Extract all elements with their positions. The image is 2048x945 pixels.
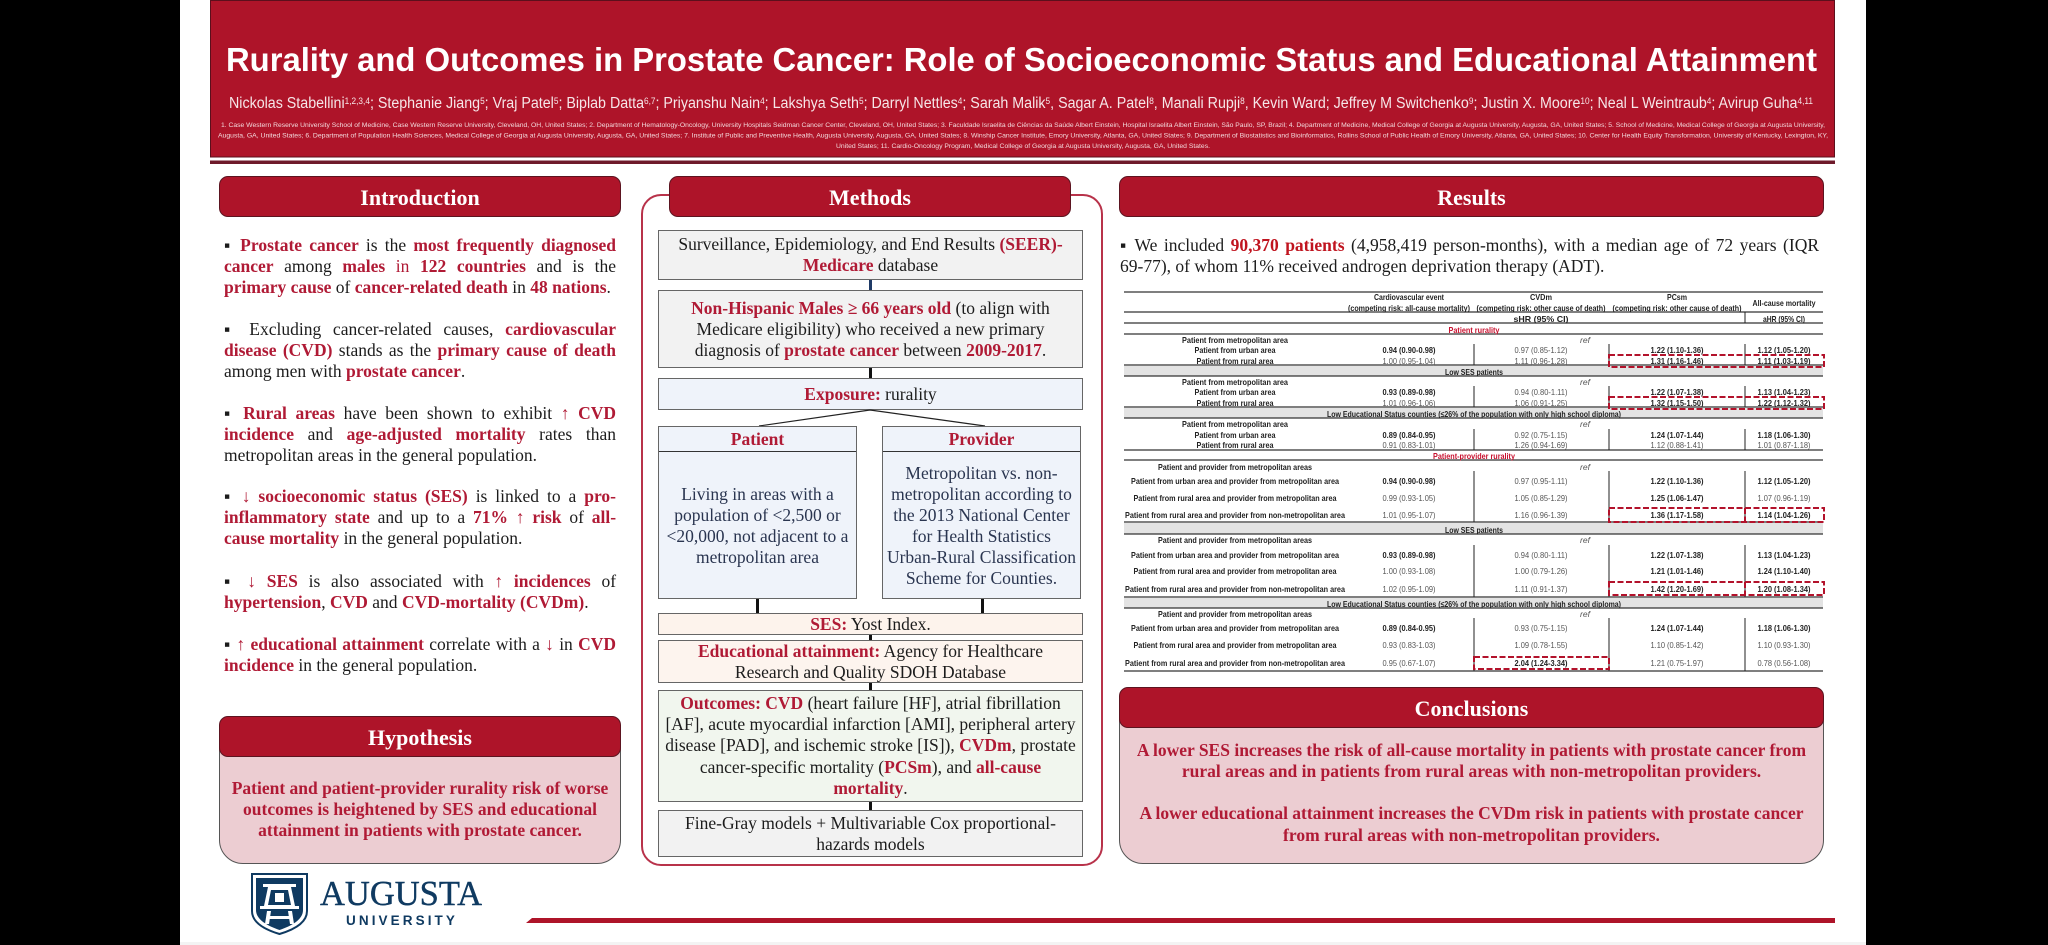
provider definition: Metropolitan vs. non- <box>905 463 1058 483</box>
rows: provider low SES: 1.20 (1.08-1.34) <box>1758 584 1811 594</box>
authors: 4 <box>1707 96 1711 106</box>
footer rule <box>526 918 1835 923</box>
rows: patient-provider rurality: Patient from urban area and provider from metropolitan area <box>1131 476 1339 486</box>
rows: low educational status: 0.92 (0.75-1.15) <box>1514 430 1568 440</box>
rows: patient rurality: 1.31 (1.16-1.46) <box>1650 356 1704 366</box>
table column headers: PCsm <box>1667 292 1687 302</box>
provider definition <box>887 463 1076 588</box>
box: models: hazards models <box>816 834 925 854</box>
authors: ; Priyanshu Nain <box>656 95 760 112</box>
provider definition: Urban-Rural Classification <box>887 547 1076 567</box>
box: provider <box>882 426 1081 599</box>
rows: provider low educational status: 1.18 (1.06-1.30) <box>1758 623 1811 633</box>
rows: patient rurality: 1.11 (1.03-1.19) <box>1758 356 1811 366</box>
box: population <box>658 290 1083 368</box>
authors: Nickolas Stabellini <box>229 95 355 112</box>
box: educational attainment <box>658 640 1083 683</box>
authors: 5 <box>554 96 558 106</box>
authors: ; Lakshya Seth <box>765 95 859 112</box>
rows: low educational status: 1.12 (0.88-1.41) <box>1650 440 1704 450</box>
authors: 4,11 <box>1798 96 1813 106</box>
rows: patient-provider rurality: 1.22 (1.10-1.36) <box>1650 476 1704 486</box>
rows: low educational status: 1.01 (0.87-1.18) <box>1758 440 1811 450</box>
rows: low educational status: 1.24 (1.07-1.44) <box>1650 430 1704 440</box>
box: outcomes: Outcomes: CVD (heart failure [HF], atrial fibrillation <box>680 693 1061 713</box>
text: SES and hypertension: hypertension, CVD and CVD-mortality (CVDm). <box>224 592 589 612</box>
rows: low educational status: 1.18 (1.06-1.30) <box>1758 430 1811 440</box>
rows: provider low educational status: 0.93 (0.75-1.15) <box>1514 623 1568 633</box>
rows: provider low SES: 1.22 (1.07-1.38) <box>1650 550 1704 560</box>
authors: ; Sarah Malik <box>962 95 1046 112</box>
rows: patient-provider rurality: Patient and provider from metropolitan areas <box>1158 462 1312 472</box>
text: rural areas <box>224 403 616 465</box>
authors: 9 <box>1469 96 1473 106</box>
rows: low SES patients: 1.32 (1.15-1.50) <box>1650 398 1704 408</box>
panel: conclusions <box>1119 687 1824 864</box>
text: educational attainment: ▪ ↑ educational attainment correlate with a ↓ in CVD <box>224 634 616 654</box>
rows: provider low SES: 1.02 (0.95-1.09) <box>1382 584 1436 594</box>
rows: provider low educational status: 2.04 (1.24-3.34) <box>1514 658 1568 668</box>
rows: patient-provider rurality: 0.99 (0.93-1.05) <box>1382 493 1436 503</box>
rows: patient-provider rurality: 1.16 (0.96-1.39) <box>1514 510 1568 520</box>
rows: provider low SES: 1.13 (1.04-1.23) <box>1758 550 1811 560</box>
rows: provider low SES: 0.94 (0.80-1.11) <box>1514 550 1568 560</box>
hypothesis text <box>232 778 608 840</box>
rows: provider low educational status: 1.10 (0.85-1.42) <box>1650 640 1704 650</box>
authors: 5 <box>480 96 485 106</box>
authors: 6,7 <box>644 96 656 106</box>
provider definition: metropolitan according to <box>891 484 1072 504</box>
authors: 5 <box>1046 96 1050 106</box>
box: exposure <box>658 378 1083 410</box>
text: SES and hypertension: ▪ ↓ SES is also associated with ↑ incidences of <box>224 571 616 591</box>
rows: patient-provider rurality: 1.01 (0.95-1.07) <box>1382 510 1436 520</box>
box: models: Fine-Gray models + Multivariable Cox proportional- <box>685 812 1056 832</box>
rows: patient rurality: 1.22 (1.10-1.36) <box>1650 345 1704 355</box>
authors: 8 <box>1240 96 1245 106</box>
table column headers: (competing risk: other cause of death) <box>1476 303 1606 313</box>
rows: provider low educational status: 0.89 (0.84-0.95) <box>1382 623 1436 633</box>
authors: 4 <box>958 96 962 106</box>
rows: patient-provider rurality: 0.94 (0.90-0.98) <box>1382 476 1436 486</box>
text: rural areas: incidence and age-adjusted mortality rates than <box>224 424 616 444</box>
box: outcomes: disease [PAD], and ischemic stroke [IS]), CVDm, prostate <box>665 735 1076 755</box>
rows: patient rurality: Patient from metropolitan area <box>1182 335 1288 345</box>
table column headers: All-cause mortality <box>1752 298 1816 308</box>
rows: provider low educational status: Patient from rural area and provider from metropolitan area <box>1134 640 1337 650</box>
rows: provider low educational status: Patient from urban area and provider from metropolitan area <box>1131 623 1339 633</box>
box: patient <box>658 426 857 599</box>
rows: provider low educational status: Patient from rural area and provider from non-metropolitan area <box>1125 658 1345 668</box>
panel: introduction <box>219 176 621 675</box>
heading: results <box>1119 176 1824 217</box>
rows: low educational status: ref <box>1580 419 1592 429</box>
rows: low SES patients: Patient from metropolitan area <box>1182 377 1288 387</box>
rows: patient-provider rurality: Patient from rural area and provider from non-metropolitan area <box>1125 510 1345 520</box>
authors: ; Biplab Datta <box>558 95 644 112</box>
rows: low educational status: 0.89 (0.84-0.95) <box>1382 430 1436 440</box>
authors: ; Darryl Nettles <box>864 95 958 112</box>
rows: low educational status: Patient from urban area <box>1194 430 1276 440</box>
logo wordmark: AUGUSTA <box>320 875 482 913</box>
affiliations: 1. Case Western Reserve University School of Medicine, Case Western Reserve University, Cleveland, OH, United States; 2. Department of Hematology-Oncology, University Hospitals Seidman Cancer Center, Cleveland, OH, United States; 3. Faculdade Israelita de Ciências da Saúde Albert Einstein, Hospital Israelita Albert Einstein, São Paulo, SP, Brazil; 4. Department of Medicine, Medical College of Georgia at Augusta University, Augusta, GA, United States; 5. School of Medicine, Medical College of Georgia at Augusta University, <box>221 122 1825 129</box>
heading: hypothesis <box>219 716 621 757</box>
title: Rurality and Outcomes in Prostate Cancer: Role of Socioeconomic Status and Educational Attainment <box>226 41 1817 78</box>
arrow: patient to SES <box>756 599 759 613</box>
rows: provider low educational status <box>1125 599 1811 668</box>
authors: 1,2,3,4 <box>345 96 370 106</box>
rows: low SES patients: 1.22 (1.12-1.32) <box>1758 398 1811 408</box>
text: cohort summary: ▪ We included 90,370 patients (4,958,419 person-months), with a median age of 72 years (IQR <box>1120 235 1819 255</box>
affiliations <box>218 122 1828 150</box>
panel: hypothesis <box>219 716 621 864</box>
table column headers: aHR (95% CI) <box>1763 314 1805 324</box>
box: population: Non-Hispanic Males ≥ 66 years old (to align with <box>691 298 1050 318</box>
table: hazard ratios <box>1124 291 1825 672</box>
header banner <box>210 0 1835 164</box>
table column headers: sHR (95% CI) <box>1514 314 1569 324</box>
box: educational attainment: Research and Quality SDOH Database <box>735 662 1006 682</box>
rows: provider low educational status: Patient and provider from metropolitan areas <box>1158 609 1312 619</box>
heading: hypothesis: Hypothesis <box>368 725 472 750</box>
rows: low educational status: Patient from metropolitan area <box>1182 419 1288 429</box>
conclusion: education <box>1140 803 1804 845</box>
authors: ; Justin X. Moore <box>1473 95 1580 112</box>
table column headers: (competing risk: all-cause mortality) <box>1348 303 1470 313</box>
rows: provider low educational status: 0.78 (0.56-1.08) <box>1758 658 1811 668</box>
rows: provider low educational status: Low Educational Status counties (≤26% of the population with only high school diploma) <box>1327 599 1621 609</box>
provider label: Provider <box>949 429 1014 449</box>
rows: provider low educational status: 0.93 (0.83-1.03) <box>1382 640 1436 650</box>
box: data source <box>658 230 1083 280</box>
box: educational attainment: Educational attainment: Agency for Healthcare <box>698 640 1043 660</box>
section bands and rules <box>1124 292 1823 671</box>
rows: patient rurality: Patient rurality <box>1448 325 1500 335</box>
text: SES and hypertension <box>224 571 616 612</box>
text: rural areas: ▪ Rural areas have been shown to exhibit ↑ CVD <box>224 403 616 423</box>
text: cohort summary <box>1120 235 1820 276</box>
rows: low educational status <box>1182 409 1811 450</box>
conclusion: education: from rural areas with non-metropolitan providers. <box>1283 824 1660 844</box>
authors: 4 <box>760 96 765 106</box>
rows: low SES patients: Low SES patients <box>1445 367 1503 377</box>
rows: patient rurality: 1.12 (1.05-1.20) <box>1758 345 1811 355</box>
rows: low educational status: 1.26 (0.94-1.69) <box>1514 440 1568 450</box>
rows: provider low educational status: ref <box>1580 609 1592 619</box>
rows: provider low SES: 1.24 (1.10-1.40) <box>1758 566 1811 576</box>
arrow: connector 1 <box>869 280 872 290</box>
authors: ; Avirup Guha <box>1711 95 1798 112</box>
box: data source: Surveillance, Epidemiology, and End Results (SEER)- <box>678 234 1063 254</box>
heading: results: Results <box>1437 185 1506 210</box>
authors <box>229 95 1813 112</box>
rows: provider low SES: Patient from rural area and provider from non-metropolitan area <box>1125 584 1345 594</box>
heading: conclusions: Conclusions <box>1415 696 1528 721</box>
heading: introduction: Introduction <box>360 185 480 210</box>
hypothesis text: Patient and patient-provider rurality risk of worse <box>232 778 608 798</box>
patient definition <box>667 484 848 567</box>
authors: , Kevin Ward; Jeffrey M Switchenko <box>1245 95 1469 112</box>
table column headers: (competing risk: other cause of death) <box>1612 303 1742 313</box>
rows: provider low SES: 1.42 (1.20-1.69) <box>1650 584 1704 594</box>
text: educational attainment: incidence in the general population. <box>224 655 477 675</box>
authors: , Sagar A. Patel <box>1050 95 1149 112</box>
affiliations: United States; 11. Cardio-Oncology Program, Medical College of Georgia at Augusta University, Augusta, GA, United States. <box>836 143 1210 150</box>
rows: provider low SES: Low SES patients <box>1445 525 1503 535</box>
rows: patient-provider rurality: 1.36 (1.17-1.58) <box>1650 510 1704 520</box>
box: SES <box>658 613 1083 635</box>
text: socioeconomic status: inflammatory state and up to a 71% ↑ risk of all- <box>224 507 616 527</box>
heading: methods: Methods <box>829 185 911 210</box>
rows: provider low SES: Patient from rural area and provider from metropolitan area <box>1134 566 1337 576</box>
rows: patient-provider rurality <box>1125 451 1811 520</box>
rows: provider low SES: 1.00 (0.79-1.26) <box>1514 566 1568 576</box>
arrow: connector education <box>869 683 872 690</box>
text: socioeconomic status: cause mortality in the general population. <box>224 528 522 548</box>
arrow: connector SES <box>869 635 872 640</box>
provider definition: the 2013 National Center <box>893 505 1070 525</box>
logo: Augusta University <box>251 873 482 935</box>
patient definition: metropolitan area <box>696 547 819 567</box>
rows: patient-provider rurality: ref <box>1580 462 1592 472</box>
rows: provider low SES: ref <box>1580 535 1592 545</box>
affiliations: Augusta, GA, United States; 6. Department of Population Health Sciences, Medical College of Georgia at Augusta University, Augusta, GA, United States; 7. Institute of Public and Preventive Health, Augusta University, Augusta, GA, United States; 8. Winship Cancer Institute, Emory University, Atlanta, GA, United States; 9. Department of Biostatistics and Bioinformatics, Rollins School of Public Health of Emory University, Atlanta, GA, United States; 10. Center for Health Equity Transformation, University of Kentucky, Lexington, KY, <box>218 132 1828 140</box>
box: SES: SES: Yost Index. <box>810 614 931 634</box>
rows: patient rurality: ref <box>1580 335 1592 345</box>
rows: patient-provider rurality: 1.12 (1.05-1.20) <box>1758 476 1811 486</box>
rows: patient-provider rurality: 1.05 (0.85-1.29) <box>1514 493 1568 503</box>
authors: , Manali Rupji <box>1154 95 1240 112</box>
text: cohort summary: 69-77), of whom 11% received androgen deprivation therapy (ADT). <box>1120 256 1604 276</box>
rows: patient-provider rurality: Patient-provider rurality <box>1433 451 1515 461</box>
rows: patient-provider rurality: Patient from rural area and provider from metropolitan area <box>1134 493 1337 503</box>
authors: ; Stephanie Jiang <box>370 95 480 112</box>
box: outcomes: mortality. <box>833 778 908 798</box>
logo wordmark: UNIVERSITY <box>346 913 458 928</box>
rows: provider low educational status: 1.21 (0.75-1.97) <box>1650 658 1704 668</box>
hypothesis text: attainment in patients with prostate cancer. <box>258 820 582 840</box>
rows: provider low educational status: 0.95 (0.67-1.07) <box>1382 658 1436 668</box>
text: cardiovascular disease <box>224 319 616 381</box>
rows: patient rurality: Patient from rural area <box>1196 356 1274 366</box>
authors: 5 <box>859 96 864 106</box>
rows: patient-provider rurality: 0.97 (0.95-1.11) <box>1514 476 1568 486</box>
arrow: connector outcomes <box>869 802 872 810</box>
patient label <box>659 427 856 452</box>
rows: provider low educational status: 1.10 (0.93-1.30) <box>1758 640 1811 650</box>
patient definition: <20,000, not adjacent to a <box>667 526 848 546</box>
box: models <box>658 810 1083 857</box>
authors: ; Neal L Weintraub <box>1590 95 1707 112</box>
provider definition: Scheme for Counties. <box>906 568 1057 588</box>
rows: provider low SES: Patient and provider from metropolitan areas <box>1158 535 1312 545</box>
rows: provider low educational status: 1.09 (0.78-1.55) <box>1514 640 1568 650</box>
heading: introduction <box>219 176 621 217</box>
rows: patient rurality: 0.94 (0.90-0.98) <box>1382 345 1436 355</box>
rows: low SES patients: 1.01 (0.96-1.06) <box>1382 398 1436 408</box>
icon: shield <box>251 873 308 935</box>
rows: patient rurality: 1.11 (0.96-1.28) <box>1514 356 1568 366</box>
rows: patient rurality: 0.97 (0.85-1.12) <box>1514 345 1568 355</box>
heading: conclusions <box>1119 687 1824 728</box>
rows: provider low SES: 1.11 (0.91-1.37) <box>1514 584 1568 594</box>
box: exposure: Exposure: rurality <box>804 384 937 404</box>
rows: provider low SES: 1.21 (1.01-1.46) <box>1650 566 1704 576</box>
authors: 10 <box>1580 96 1590 106</box>
patient label: Patient <box>731 429 784 449</box>
text: prostate cancer burden: ▪ Prostate cancer is the most frequently diagnosed <box>224 235 616 255</box>
rows: provider low SES <box>1125 525 1811 594</box>
rows: low educational status: Patient from rural area <box>1196 440 1274 450</box>
heading: methods <box>669 176 1071 217</box>
provider label <box>883 427 1080 452</box>
box: population: diagnosis of prostate cancer between 2009-2017. <box>695 340 1046 360</box>
rows: low SES patients: 1.06 (0.91-1.25) <box>1514 398 1568 408</box>
provider definition: for Health Statistics <box>912 526 1051 546</box>
rows: provider low SES: 0.93 (0.89-0.98) <box>1382 550 1436 560</box>
text: cardiovascular disease: among men with prostate cancer. <box>224 361 465 381</box>
authors: 8 <box>1149 96 1154 106</box>
box: outcomes: cancer-specific mortality (PCSm), and all-cause <box>700 757 1041 777</box>
rows: provider low educational status: 1.24 (1.07-1.44) <box>1650 623 1704 633</box>
patient definition: population of <2,500 or <box>674 505 841 525</box>
rows: low SES patients: 0.93 (0.89-0.98) <box>1382 387 1436 397</box>
text: cardiovascular disease: ▪ Excluding cancer-related causes, cardiovascular <box>224 319 616 339</box>
table column headers <box>1348 292 1816 324</box>
authors: ; Vraj Patel <box>485 95 554 112</box>
table column headers: Cardiovascular event <box>1374 292 1444 302</box>
box: data source: Medicare database <box>803 255 938 275</box>
arrow: connector 2 <box>869 368 872 378</box>
panel: results <box>1119 176 1825 672</box>
rows: patient-provider rurality: 1.14 (1.04-1.26) <box>1758 510 1811 520</box>
conclusion: SES <box>1137 740 1806 781</box>
box: population: Medicare eligibility) who received a new primary <box>697 318 1044 338</box>
hypothesis text: outcomes is heightened by SES and educational <box>243 799 597 819</box>
rows: patient rurality: 1.00 (0.95-1.04) <box>1382 356 1436 366</box>
text: prostate cancer burden <box>224 235 616 297</box>
rows: provider low SES: Patient from urban area and provider from metropolitan area <box>1131 550 1339 560</box>
panel: methods <box>641 176 1103 866</box>
rows: low SES patients: Patient from urban area <box>1194 387 1276 397</box>
arrow: split to patient and provider <box>758 409 986 426</box>
text: socioeconomic status: ▪ ↓ socioeconomic status (SES) is linked to a pro- <box>224 486 616 506</box>
text: educational attainment <box>224 634 616 675</box>
table column headers: CVDm <box>1530 292 1552 302</box>
text: rural areas: metropolitan areas in the general population. <box>224 445 537 465</box>
rows: low SES patients: Patient from rural area <box>1196 398 1274 408</box>
rows: low SES patients: 0.94 (0.80-1.11) <box>1514 387 1568 397</box>
rows: patient-provider rurality: 1.07 (0.96-1.19) <box>1758 493 1811 503</box>
text: cardiovascular disease: disease (CVD) stands as the primary cause of death <box>224 340 616 360</box>
rows: low educational status: Low Educational Status counties (≤26% of the population with only high school diploma) <box>1327 409 1621 419</box>
rows: patient rurality <box>1182 325 1811 366</box>
rows: low SES patients: ref <box>1580 377 1592 387</box>
text: prostate cancer burden: cancer among males in 122 countries and is the <box>224 256 616 276</box>
conclusion: SES: rural areas and in patients from rural areas with non-metropolitan providers. <box>1182 761 1761 781</box>
rows: low SES patients: 1.22 (1.07-1.38) <box>1650 387 1704 397</box>
rows: patient-provider rurality: 1.25 (1.06-1.47) <box>1650 493 1704 503</box>
conclusion: SES: A lower SES increases the risk of all-cause mortality in patients with prostate cancer from <box>1137 740 1806 760</box>
rows: patient rurality: Patient from urban area <box>1194 345 1276 355</box>
rows: low SES patients: 1.13 (1.04-1.23) <box>1758 387 1811 397</box>
box: outcomes <box>658 690 1083 802</box>
rows: low educational status: 0.91 (0.83-1.01) <box>1382 440 1436 450</box>
conclusion: education: A lower educational attainment increases the CVDm risk in patients with prostate cancer <box>1140 803 1803 823</box>
arrow: provider to SES <box>981 599 984 613</box>
text: prostate cancer burden: primary cause of cancer-related death in 48 nations. <box>224 277 611 297</box>
patient definition: Living in areas with a <box>681 484 834 504</box>
text: socioeconomic status <box>224 486 616 548</box>
box: outcomes: [AF], acute myocardial infarction [AMI], peripheral artery <box>665 714 1076 734</box>
rows: low SES patients <box>1182 367 1811 408</box>
callouts: dashed highlights <box>1474 355 1824 669</box>
rows: provider low SES: 1.00 (0.93-1.08) <box>1382 566 1436 576</box>
